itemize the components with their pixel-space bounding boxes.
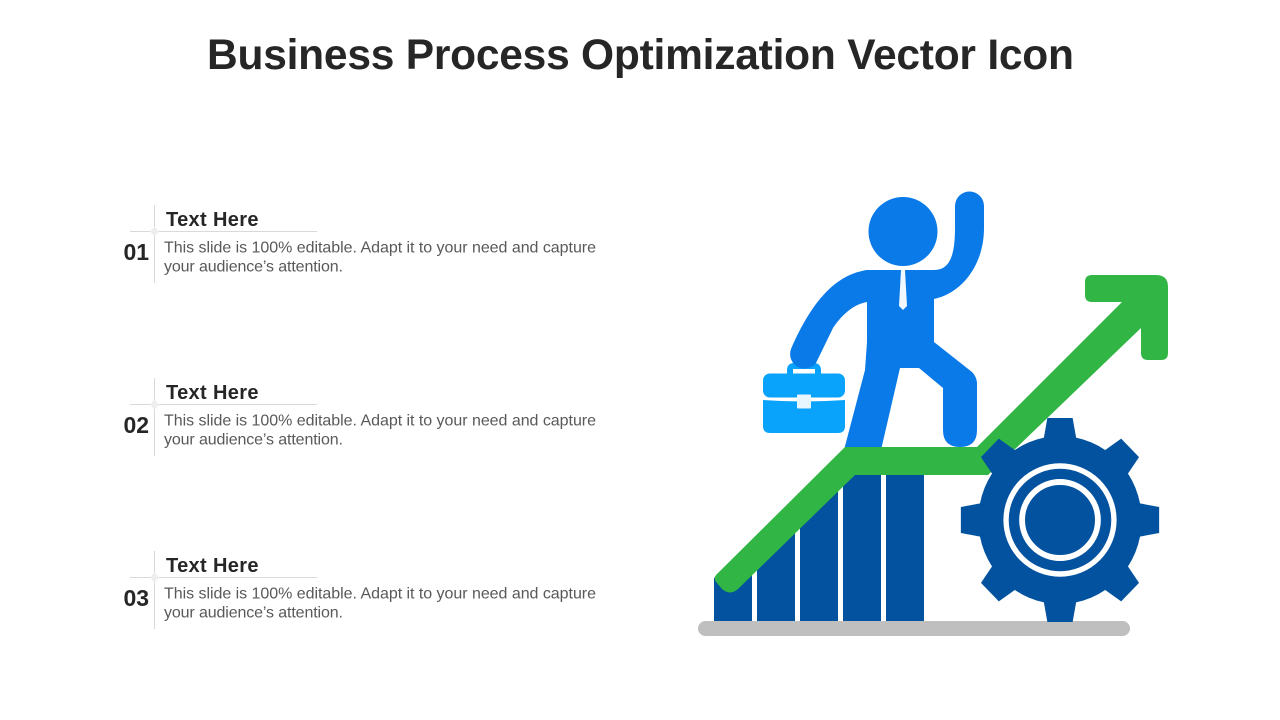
item number 02: 02 xyxy=(124,412,149,438)
item body 02 xyxy=(164,412,596,448)
item heading 02: Text Here xyxy=(166,382,258,404)
item body 03: your audience’s attention. xyxy=(164,604,343,622)
gear inner ring xyxy=(1022,482,1098,558)
icon: businessman xyxy=(844,192,984,450)
list item 01 xyxy=(124,205,596,283)
icon: briefcase xyxy=(763,366,845,433)
briefcase handle xyxy=(790,366,818,374)
legs xyxy=(844,342,977,450)
figure torso xyxy=(867,270,934,343)
growth arrow xyxy=(715,275,1168,592)
necktie xyxy=(899,270,907,310)
item body 02: This slide is 100% editable. Adapt it to your need and capture xyxy=(164,412,596,430)
list item 02 xyxy=(124,378,596,456)
list item 03 xyxy=(124,551,596,629)
item heading 03: Text Here xyxy=(166,555,258,577)
item body 01 xyxy=(164,240,596,276)
item body 03 xyxy=(164,586,596,622)
item heading 01: Text Here xyxy=(166,209,258,231)
icon: gear xyxy=(961,418,1159,622)
item body 01: This slide is 100% editable. Adapt it to your need and capture xyxy=(164,240,596,256)
arm holding briefcase xyxy=(790,270,867,369)
bar chart xyxy=(714,465,924,621)
item number 03: 03 xyxy=(124,585,149,611)
head xyxy=(868,197,938,266)
item body 03: This slide is 100% editable. Adapt it to your need and capture xyxy=(164,586,596,602)
raised arm xyxy=(934,192,984,299)
briefcase clasp xyxy=(797,394,811,408)
ground bar xyxy=(698,621,1130,636)
briefcase top xyxy=(763,374,845,398)
item number 01: 01 xyxy=(124,239,149,265)
gear outer ring xyxy=(1006,466,1114,574)
item body 02: your audience’s attention. xyxy=(164,432,343,448)
item body 01: your audience’s attention. xyxy=(164,258,343,276)
briefcase bottom xyxy=(763,400,845,433)
title: Business Process Optimization Vector Icon xyxy=(207,32,1074,79)
